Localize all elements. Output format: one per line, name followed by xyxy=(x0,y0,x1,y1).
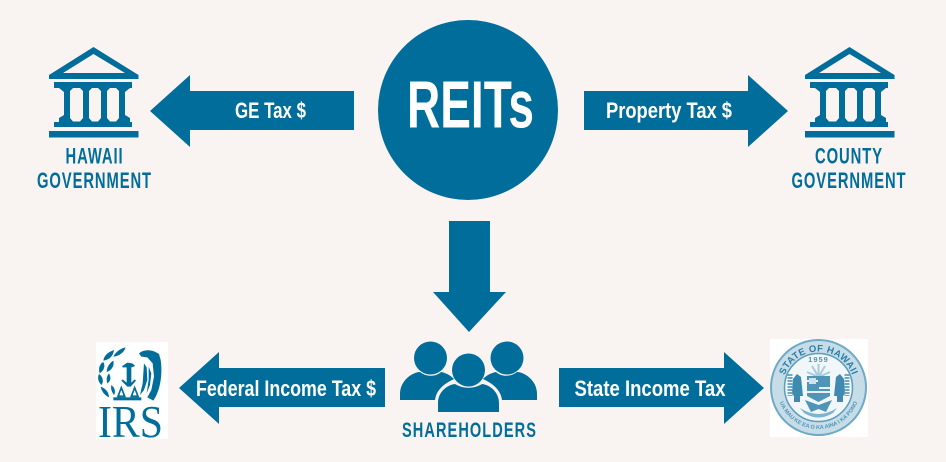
sunburst xyxy=(807,364,830,377)
icon: IRS logo xyxy=(96,342,168,447)
label: County Government xyxy=(792,144,906,193)
icon: IRS logo: IRS xyxy=(98,396,163,447)
icon: State of Hawaii seal xyxy=(770,339,868,437)
icon: Hawaii government building xyxy=(49,47,138,138)
icon: State of Hawaii seal: UA MAU KE EA O KA AINA I KA PONO xyxy=(780,401,857,429)
label: Hawaii Government: GOVERNMENT xyxy=(37,168,152,193)
arrow: Federal Income Tax xyxy=(179,352,385,424)
arrow: State Income Tax: State Income Tax xyxy=(574,376,726,401)
icon: county government building xyxy=(805,47,894,138)
circle: REITs xyxy=(378,20,558,200)
arrow: Property Tax: Property Tax $ xyxy=(606,98,732,123)
shield xyxy=(807,376,830,402)
label: Shareholders: SHAREHOLDERS xyxy=(402,418,537,442)
arrow: Property Tax xyxy=(584,75,788,147)
label: County Government: COUNTY xyxy=(815,144,883,168)
icon: State of Hawaii seal: STATE OF HAWAII xyxy=(779,344,858,374)
icon: shareholders xyxy=(400,342,537,412)
phoenix and scroll xyxy=(805,400,832,412)
arrow: State Income Tax xyxy=(559,352,764,424)
arrow: GE Tax: GE Tax $ xyxy=(235,98,306,123)
label: Hawaii Government xyxy=(37,144,152,193)
arrow: GE Tax xyxy=(150,75,354,147)
ferns xyxy=(790,374,847,396)
icon: State of Hawaii seal: 1959 xyxy=(808,355,829,364)
figures xyxy=(792,374,845,402)
arrow: Federal Income Tax: Federal Income Tax $ xyxy=(196,376,376,401)
circle: REITs: REITs xyxy=(407,68,534,142)
label: Hawaii Government: HAWAII xyxy=(66,144,124,168)
arrow: REITs to shareholders xyxy=(433,221,506,332)
